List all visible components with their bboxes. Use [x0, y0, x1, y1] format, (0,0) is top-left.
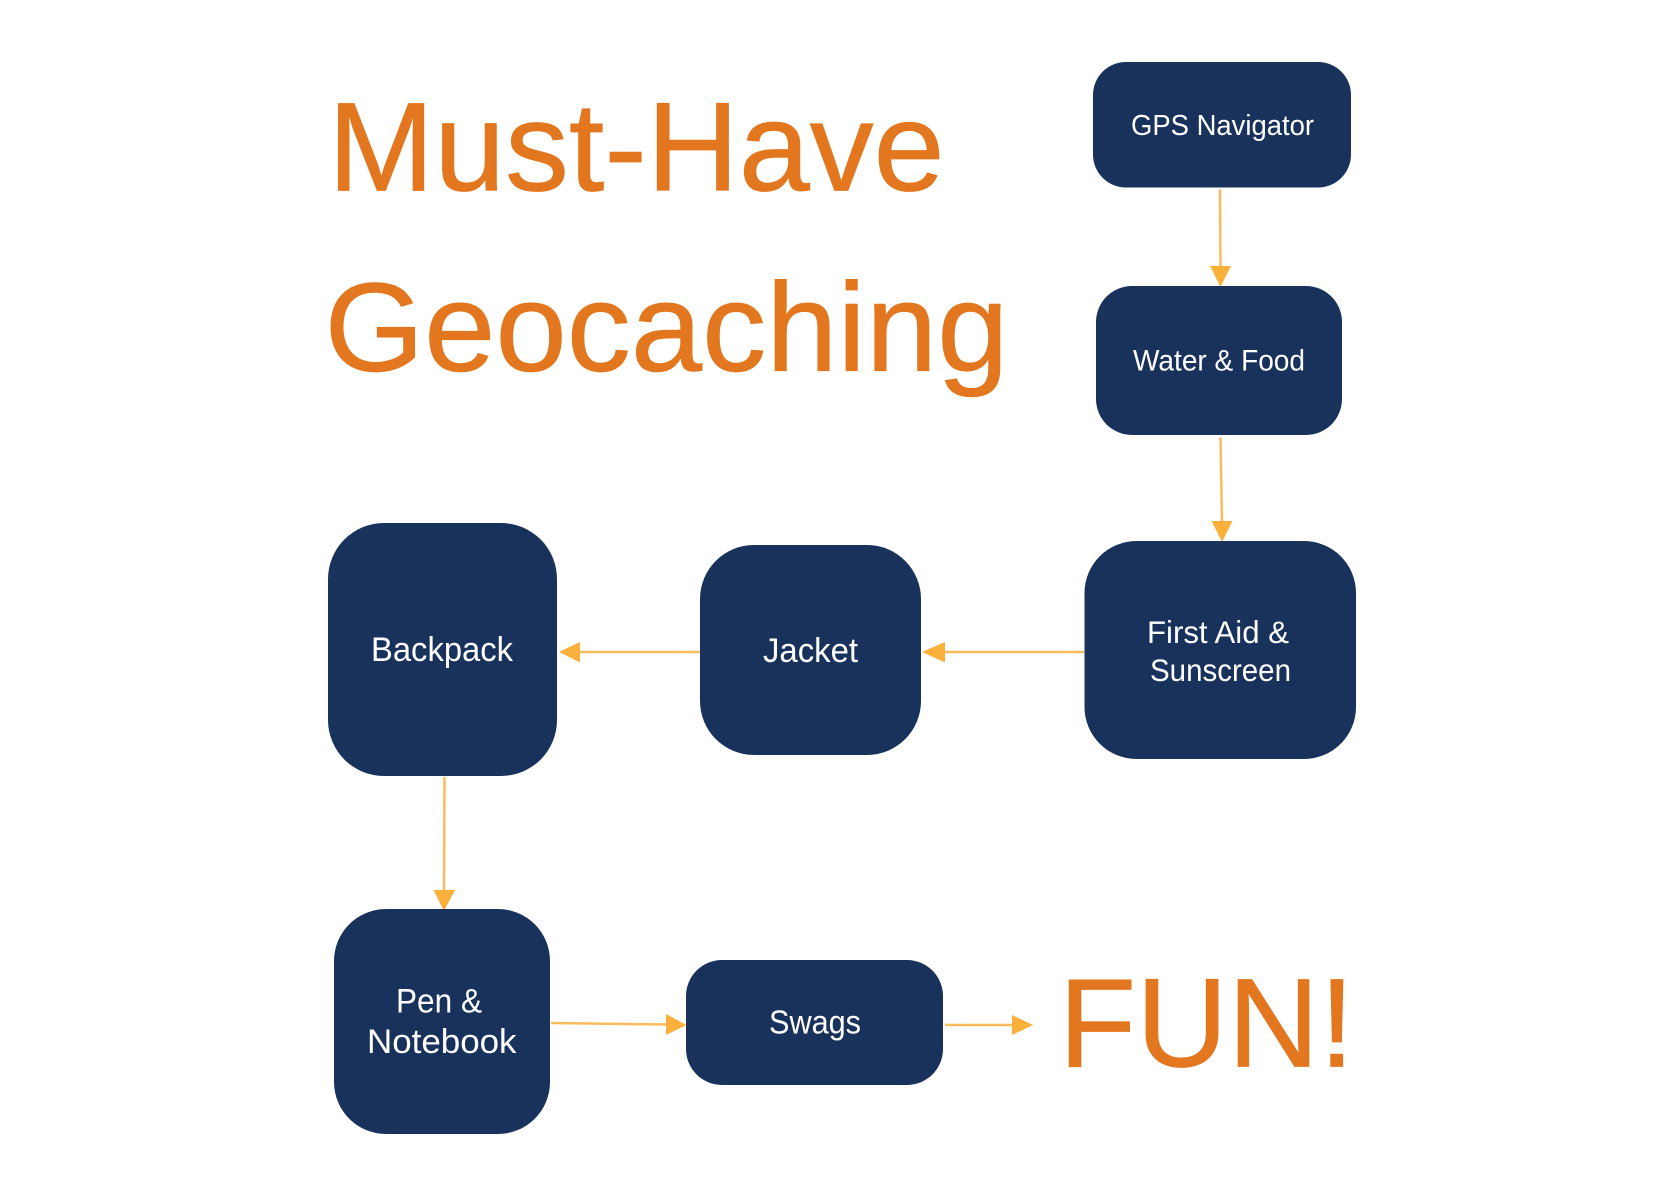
box: First Aid & Sunscreen: First Aid &	[1147, 614, 1289, 650]
box: First Aid & Sunscreen	[1084, 541, 1356, 759]
box: Pen & Notebook	[334, 909, 550, 1134]
box: Pen & Notebook: Pen &	[396, 982, 482, 1020]
box: Water & Food: Water & Food	[1133, 344, 1305, 378]
box: Swags: Swags	[769, 1004, 861, 1042]
title: Must-Have	[328, 77, 944, 218]
box: First Aid & Sunscreen: Sunscreen	[1150, 652, 1291, 688]
arrow: First Aid to Jacket	[922, 642, 1084, 662]
box: Water & Food	[1096, 286, 1342, 435]
box: Backpack: Backpack	[371, 631, 514, 669]
arrow: Backpack to Pen & Notebook	[434, 777, 455, 911]
arrow: Pen & Notebook to Swags	[551, 1014, 686, 1035]
arrow: Water & Food to First Aid	[1212, 438, 1232, 542]
arrow: Swags to FUN	[945, 1015, 1033, 1035]
box: Jacket: Jacket	[763, 632, 859, 670]
box: GPS Navigator: GPS Navigator	[1131, 110, 1314, 142]
title: Geocaching	[324, 257, 1008, 398]
box: Swags	[686, 960, 943, 1085]
arrow: GPS Navigator to Water & Food	[1210, 190, 1231, 287]
box: Pen & Notebook: Notebook	[367, 1023, 518, 1061]
box: Jacket	[700, 545, 921, 755]
box: Backpack	[328, 523, 557, 776]
box: GPS Navigator	[1093, 62, 1351, 188]
title	[324, 77, 1008, 398]
text: FUN!: FUN!	[1059, 953, 1354, 1094]
arrow: Jacket to Backpack	[559, 642, 700, 662]
